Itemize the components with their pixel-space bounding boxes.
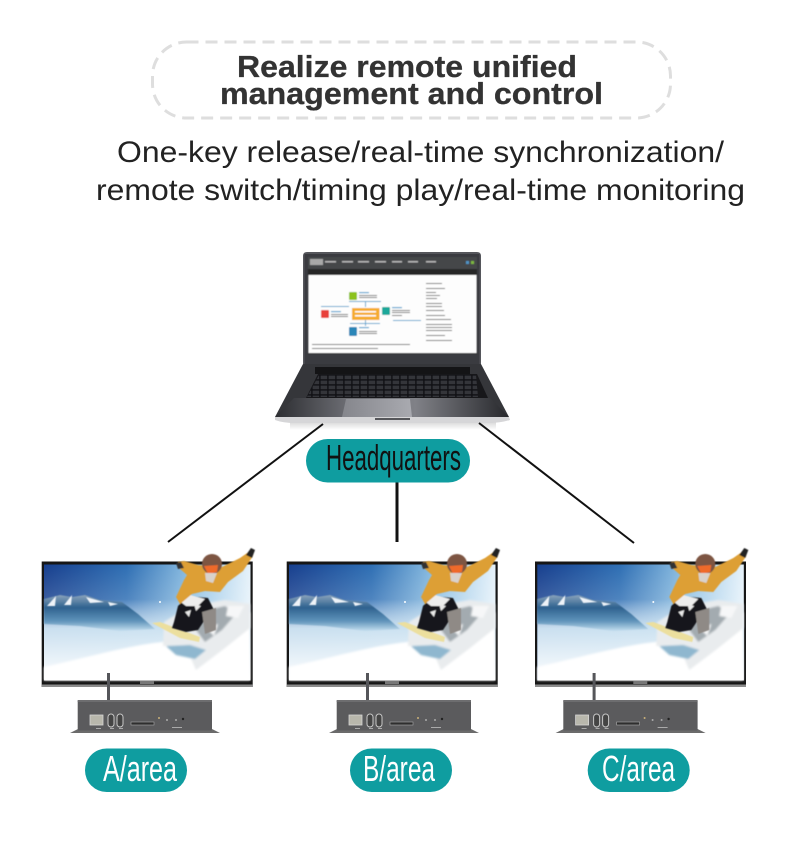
subtitle text: remote switch/timing play/real-time monitoring — [96, 174, 745, 207]
laptop base — [275, 364, 510, 423]
C area label — [588, 748, 690, 792]
subtitle text — [96, 136, 745, 207]
B area label: B/area — [363, 748, 436, 789]
C area label: C/area — [602, 748, 676, 789]
C area media player box — [556, 673, 706, 733]
headquarters label: Headquarters — [326, 437, 461, 478]
headquarters label — [306, 437, 470, 482]
B area media player box — [329, 673, 479, 733]
connector lines from headquarters to areas — [168, 423, 634, 543]
heading panel with dashed border — [152, 42, 670, 118]
subtitle text: One-key release/real-time synchronization/ — [117, 136, 725, 169]
A area display — [42, 548, 255, 687]
laptop — [275, 252, 510, 430]
heading: Realize remote unified — [237, 49, 577, 84]
heading — [220, 49, 603, 111]
A area label — [85, 748, 187, 792]
heading: management and control — [220, 76, 603, 111]
B area display — [287, 548, 500, 687]
C area display — [535, 548, 748, 687]
A area label: A/area — [103, 748, 178, 789]
A area media player box — [70, 673, 220, 733]
laptop screen — [308, 257, 477, 354]
